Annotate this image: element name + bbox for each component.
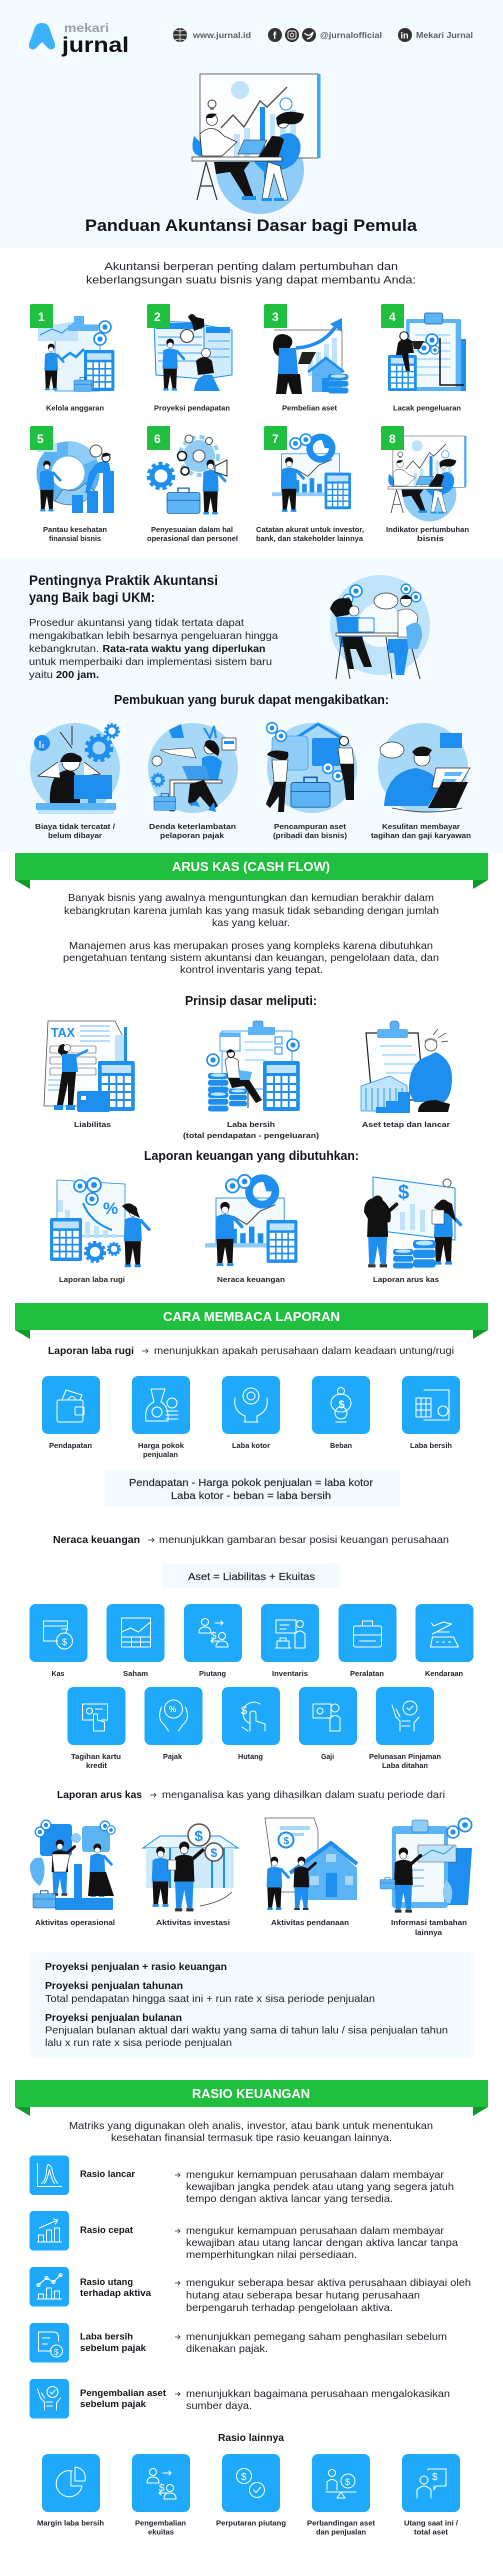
label: Pencampuran aset <box>274 822 346 831</box>
badge 5: 5 <box>37 432 44 446</box>
heading: prinsip dasar: Prinsip dasar meliputi: <box>185 994 317 1008</box>
name: terhadap aktiva <box>80 2288 152 2298</box>
illustration: biaya tidak tercatat <box>30 723 120 814</box>
icon: perputaran piutang <box>222 2454 280 2512</box>
label: bisnis <box>417 534 444 543</box>
label: ekuitas <box>148 2528 174 2536</box>
label: Indikator pertumbuhan <box>386 525 469 534</box>
icon: $ <box>54 2348 59 2357</box>
label: Pajak <box>163 1752 183 1761</box>
label: Pembelian aset <box>282 404 337 412</box>
panel: proyeksi penjualan: Penjualan bulanan aktual dari waktu yang sama di tahun lalu / sisa penjualan tahun <box>45 2024 448 2036</box>
panel: pentingnya praktik akuntansi <box>0 558 503 853</box>
icon <box>30 2379 69 2418</box>
title: Panduan Akuntansi Dasar bagi Pemula <box>85 216 418 235</box>
label: Perputaran piutang <box>216 2518 286 2528</box>
text: cash flow explanation: pengetahuan tentang sistem akuntansi dan keuangan, pengelolaan data, dan <box>63 952 439 964</box>
illustration: pencampuran aset <box>266 723 357 813</box>
website link: www.jurnal.id <box>192 31 251 40</box>
icon: piutang: $ <box>211 1631 217 1642</box>
item 7: catatan akurat <box>256 426 364 543</box>
icon: perbandingan aset: $ <box>345 2477 350 2487</box>
subheading: Pembukuan yang buruk dapat mengakibatkan: <box>114 693 389 707</box>
illustration: liabilitas (tax form): TAX <box>51 1025 75 1040</box>
text: rasio intro: Matriks yang digunakan oleh analis, investor, atau bank untuk menentukan <box>69 2120 433 2132</box>
badge 2: 2 <box>154 310 161 324</box>
logo: mekari jurnal: jurnal <box>61 34 129 57</box>
row: rasio cepat <box>30 2211 458 2261</box>
icon: pendapatan <box>42 1376 100 1434</box>
description <box>175 2388 450 2412</box>
badge 8: 8 <box>389 432 396 446</box>
label <box>256 525 364 543</box>
label <box>43 525 107 543</box>
paragraph: untuk memperbaiki dan implementasi sistem baru <box>29 656 272 668</box>
description <box>175 2331 447 2355</box>
description: menunjukkan bagaimana perusahaan mengalokasikan <box>186 2388 450 2400</box>
label <box>369 1752 441 1770</box>
label: Proyeksi pendapatan <box>154 404 230 412</box>
icon: beban: $ <box>338 1399 345 1411</box>
social handles: f <box>273 31 277 42</box>
illustration: aktivitas investasi: $ <box>210 1846 218 1860</box>
description: kewajiban jangka pendek atau utang yang segera jatuh <box>186 2181 454 2193</box>
illustration: informasi tambahan <box>380 1818 472 1913</box>
text: neraca keuangan definition: Neraca keuangan <box>53 1534 140 1546</box>
item 8: indikator pertumbuhan <box>381 426 469 543</box>
icon: laba bersih <box>402 1376 460 1434</box>
illustration: aset tetap dan lancar <box>361 1021 452 1113</box>
label: Laba bersih <box>227 1120 275 1129</box>
label <box>147 525 238 543</box>
badge 4: 4 <box>389 310 396 324</box>
paragraph: Rata-rata waktu yang diperlukan <box>102 643 266 655</box>
label: Harga pokok <box>138 1441 185 1450</box>
linkedin: in <box>400 30 408 40</box>
label <box>138 1441 185 1459</box>
icon: margin laba bersih <box>42 2454 100 2512</box>
icon: inventaris <box>261 1604 319 1662</box>
banner: arus kas <box>15 853 488 889</box>
label <box>183 1120 320 1140</box>
label: Kelola anggaran <box>46 404 104 412</box>
label: Saham <box>123 1669 148 1678</box>
text: cash flow explanation: kontrol inventaris yang tepat. <box>180 964 323 976</box>
banner: arus kas: ARUS KAS (CASH FLOW) <box>172 859 330 874</box>
label <box>71 1752 121 1770</box>
icon: pengembalian ekuitas: $ <box>159 2483 165 2494</box>
icon: kas: $ <box>62 1637 67 1647</box>
panel: proyeksi penjualan: Proyeksi penjualan tahunan <box>45 1980 183 1992</box>
panel: proyeksi penjualan: Proyeksi penjualan + rasio keuangan <box>45 1961 227 1973</box>
text: cash flow explanation: Banyak bisnis yang awalnya menguntungkan dan kemudian berakhir dalam <box>68 892 434 904</box>
label: bank, dan stakeholder lainnya <box>256 534 364 543</box>
description: mengukur kemampuan perusahaan dalam membayar <box>186 2225 445 2237</box>
description: menunjukkan pemegang saham penghasilan sebelum <box>186 2331 447 2343</box>
label: Laba bersih <box>410 1441 452 1450</box>
description: sumber daya. <box>186 2400 252 2412</box>
banner: rasio keuangan: RASIO KEUANGAN <box>192 2086 310 2101</box>
name: Rasio lancar <box>80 2169 136 2179</box>
label: Margin laba bersih <box>37 2518 104 2528</box>
text: cash flow explanation: kebangkrutan karena jumlah kas yang masuk tidak sebanding dengan jumlah <box>64 905 439 917</box>
name <box>80 2332 147 2353</box>
linkedin <box>398 28 473 42</box>
label: Gaji <box>321 1752 334 1761</box>
label: dan penjualan <box>316 2528 366 2536</box>
illustration: laporan arus kas: $ <box>398 1182 409 1204</box>
description: memperhitungkan nilai persediaan. <box>186 2249 357 2261</box>
icon: tagihan kartu kredit <box>68 1687 126 1745</box>
label: Pelunasan Pinjaman <box>369 1752 441 1761</box>
text: rasio intro: kesehatan finansial termasuk tipe rasio keuangan lainnya. <box>111 2132 392 2144</box>
item 5: pantau kesehatan <box>30 426 114 543</box>
description: berpengaruh terhadap pengelolaan aktiva. <box>186 2302 393 2314</box>
panel: proyeksi penjualan <box>30 1952 473 2058</box>
description: mengukur seberapa besar aktiva perusahaan dibiayai oleh <box>186 2277 471 2289</box>
description <box>175 2225 458 2261</box>
label: Pengembalian <box>135 2518 186 2528</box>
formula box: laba: Pendapatan - Harga pokok penjualan = laba kotor <box>129 1477 374 1489</box>
label: finansial bisnis <box>49 534 101 543</box>
item 1: kelola anggaran <box>30 304 114 412</box>
badge 3: 3 <box>272 310 279 324</box>
label <box>307 2518 375 2536</box>
panel: proyeksi penjualan: lalu x run rate x sisa periode penjualan <box>45 2037 232 2049</box>
panel: header <box>0 0 503 248</box>
heading: yang Baik bagi UKM: <box>29 590 155 605</box>
label: Tagihan kartu <box>71 1752 121 1761</box>
illustration: aktivitas pendanaan <box>265 1818 357 1910</box>
description: hutang atau seberapa besar hutang perusahaan <box>186 2290 420 2302</box>
label: belum dibayar <box>48 831 102 840</box>
label: Pantau kesehatan <box>43 525 107 534</box>
illustration: liabilitas (tax form) <box>44 1021 135 1112</box>
label: Perbandingan aset <box>307 2518 375 2528</box>
name <box>80 2388 166 2409</box>
row: rasio lancar <box>30 2156 454 2205</box>
icon <box>30 2323 69 2362</box>
label: penjualan <box>143 1450 178 1459</box>
label: total aset <box>414 2528 448 2536</box>
illustration: denda keterlambatan <box>148 723 238 813</box>
name <box>80 2277 152 2298</box>
paragraph: mengakibatkan lebih besarnya pengeluaran hingga <box>29 630 278 642</box>
label: pelaporan pajak <box>160 831 225 840</box>
paragraph: 200 jam. <box>56 669 99 681</box>
banner: cara membaca laporan <box>15 1303 488 1339</box>
name: sebelum pajak <box>80 2399 147 2409</box>
illustration: aktivitas operasional <box>30 1820 115 1910</box>
label <box>149 822 236 840</box>
illustration: neraca keuangan <box>205 1175 297 1266</box>
icon: kas <box>30 1604 88 1662</box>
icon: perbandingan aset <box>312 2454 370 2512</box>
label: Aset tetap dan lancar <box>362 1120 450 1129</box>
item 3: pembelian aset <box>264 304 348 412</box>
social handles <box>268 28 382 42</box>
name: sebelum pajak <box>80 2343 147 2353</box>
social handles: @jurnalofficial <box>320 31 382 40</box>
label: Kesulitan membayar <box>382 822 460 831</box>
icon: pengembalian ekuitas <box>132 2454 190 2512</box>
item 6: penyesuaian operasional <box>147 426 238 543</box>
illustration: konsultasi <box>330 575 430 679</box>
row: rasio utang <box>30 2267 471 2314</box>
badge 6: 6 <box>154 432 161 446</box>
icon row: laba rugi components <box>42 1376 460 1459</box>
item 4: lacak pengeluaran <box>381 304 466 412</box>
illustration: two people reviewing growth chart <box>192 74 320 214</box>
icon <box>30 2156 69 2195</box>
label: Lacak pengeluaran <box>393 404 461 412</box>
text: cash flow explanation <box>63 892 439 976</box>
label: Kas <box>52 1669 64 1678</box>
label: Beban <box>330 1441 352 1450</box>
heading <box>29 573 218 605</box>
row: pengembalian aset <box>30 2379 450 2418</box>
label: Utang saat ini / <box>404 2518 459 2528</box>
label <box>386 525 469 543</box>
panel: benefits grid <box>30 304 469 543</box>
label <box>135 2518 186 2536</box>
text: neraca keuangan definition: menunjukkan gambaran besar posisi keuangan perusahaan <box>159 1534 449 1546</box>
label <box>391 1918 467 1937</box>
description <box>175 2277 471 2314</box>
label: Hutang <box>238 1752 263 1761</box>
label: lainnya <box>415 1928 443 1937</box>
icon: harga pokok <box>132 1376 190 1434</box>
description: dikenakan pajak. <box>186 2343 268 2355</box>
label: Liabilitas <box>74 1120 111 1129</box>
paragraph <box>29 617 278 681</box>
label: Denda keterlambatan <box>149 822 236 831</box>
icon: kendaraan <box>416 1604 474 1662</box>
label: Aktivitas investasi <box>156 1918 230 1927</box>
paragraph: Prosedur akuntansi yang tidak tertata dapat <box>29 617 244 629</box>
label <box>35 822 116 840</box>
linkedin: Mekari Jurnal <box>416 31 473 40</box>
formula box: aset <box>162 1563 340 1588</box>
illustration: laporan arus kas <box>364 1177 460 1269</box>
label: kredit <box>86 1761 107 1770</box>
description: tempo dengan aktiva lancar yang tersedia. <box>186 2193 393 2205</box>
icon: pajak <box>144 1687 202 1745</box>
icon: peralatan <box>338 1604 396 1662</box>
website link <box>173 28 251 42</box>
text: laporan arus kas definition: Laporan arus kas <box>57 1789 142 1801</box>
logo: mekari jurnal <box>29 21 129 57</box>
icon: hutang <box>222 1687 280 1745</box>
logo: mekari jurnal: mekari <box>64 21 109 35</box>
banner: rasio keuangan <box>15 2080 488 2116</box>
icon: piutang <box>184 1604 242 1662</box>
label: operasional dan personel <box>147 534 238 543</box>
banner: cara membaca laporan: CARA MEMBACA LAPORAN <box>163 1309 340 1324</box>
label: Kendaraan <box>425 1669 463 1678</box>
icon row: rasio lainnya <box>37 2454 460 2536</box>
description: mengukur kemampuan perusahaan dalam membayar <box>186 2169 445 2181</box>
text: cash flow explanation: kas yang keluar. <box>212 917 290 929</box>
text: cash flow explanation: Manajemen arus kas merupakan proses yang kompleks karena dibutuhkan <box>69 940 433 952</box>
intro text <box>86 261 416 286</box>
panel: proyeksi penjualan: Total pendapatan hingga saat ini + run rate x sisa periode penjualan <box>45 1993 375 2005</box>
label: Laba ditahan <box>382 1761 428 1770</box>
label: Laba kotor <box>232 1441 270 1450</box>
icon: perputaran piutang: $ <box>241 2472 247 2483</box>
intro text: keberlangsungan suatu bisnis yang dapat membantu Anda: <box>86 274 416 286</box>
label: Neraca keuangan <box>217 1275 285 1284</box>
illustration: laba bersih <box>207 1021 300 1112</box>
label: Aktivitas pendanaan <box>271 1918 349 1927</box>
label: Pendapatan <box>49 1441 92 1450</box>
heading: laporan keuangan: Laporan keuangan yang dibutuhkan: <box>144 1149 359 1163</box>
text: rasio intro <box>69 2120 433 2144</box>
label: Laporan laba rugi <box>59 1275 125 1284</box>
formula box: laba: Laba kotor - beban = laba bersih <box>171 1490 331 1502</box>
formula box: aset: Aset = Liabilitas + Ekuitas <box>188 1571 315 1583</box>
icon: pajak: % <box>169 1705 176 1714</box>
text: laporan arus kas definition: menganalisa kas yang dihasilkan dalam suatu periode dari <box>162 1789 445 1801</box>
illustration: aktivitas pendanaan: $ <box>284 1836 290 1847</box>
badge 7: 7 <box>272 432 279 446</box>
intro text: Akuntansi berperan penting dalam pertumbuhan dan <box>104 261 398 273</box>
description <box>175 2169 454 2205</box>
label: Piutang <box>199 1669 226 1678</box>
icon: utang saat ini <box>402 2454 460 2512</box>
item 2: proyeksi pendapatan <box>147 304 232 412</box>
icon: pelunasan pinjaman laba ditahan <box>376 1687 434 1745</box>
label: (total pendapatan - pengeluaran) <box>183 1131 320 1140</box>
row: laba bersih sebelum pajak <box>30 2323 447 2362</box>
label: Penyesuaian dalam hal <box>151 525 233 534</box>
icon: laba kotor <box>222 1376 280 1434</box>
label: tagihan dan gaji karyawan <box>371 831 471 840</box>
formula box: laba <box>104 1470 400 1507</box>
icon <box>30 2267 69 2306</box>
heading: Pentingnya Praktik Akuntansi <box>29 573 218 588</box>
icon <box>30 2211 69 2250</box>
illustration: aktivitas investasi <box>143 1824 238 1911</box>
description: kewajiban atau utang lancar dengan aktiva lancar tanpa <box>186 2237 458 2249</box>
name: Rasio cepat <box>80 2225 133 2235</box>
illustration: kesulitan membayar <box>378 723 470 813</box>
label <box>371 822 471 840</box>
icon: hutang: $ <box>241 1705 247 1717</box>
name: Pengembalian aset <box>80 2388 166 2398</box>
text: laporan laba rugi definition: menunjukkan apakah perusahaan dalam keadaan untung/rugi <box>154 1345 454 1357</box>
icon: utang saat ini: $ <box>432 2472 438 2483</box>
label: Laporan arus kas <box>373 1275 439 1284</box>
icon grid: neraca components <box>30 1604 474 1770</box>
label <box>273 822 347 840</box>
label: Peralatan <box>350 1669 384 1678</box>
heading: rasio lainnya: Rasio lainnya <box>218 2432 284 2444</box>
label: Informasi tambahan <box>391 1918 467 1927</box>
name: Laba bersih <box>80 2332 133 2342</box>
label: Catatan akurat untuk investor, <box>256 525 364 534</box>
badge 1: 1 <box>38 310 45 324</box>
panel: proyeksi penjualan: Proyeksi penjualan bulanan <box>45 2012 182 2024</box>
text: laporan laba rugi definition: Laporan laba rugi <box>48 1345 134 1357</box>
label <box>404 2518 459 2536</box>
icon: gaji <box>299 1687 357 1745</box>
illustration: laporan laba rugi <box>50 1178 149 1267</box>
paragraph: kebangkrutan. <box>29 643 99 655</box>
paragraph: yaitu <box>29 669 53 681</box>
illustration: laporan laba rugi: % <box>103 1199 118 1218</box>
label: (pribadi dan bisnis) <box>273 831 347 840</box>
label: Biaya tidak tercatat / <box>35 822 116 831</box>
label: Inventaris <box>272 1669 308 1678</box>
illustration: aktivitas investasi: $ <box>194 1828 204 1845</box>
label: Aktivitas operasional <box>35 1918 115 1927</box>
icon: beban <box>312 1376 370 1434</box>
name: Rasio utang <box>80 2277 133 2287</box>
icon: saham <box>106 1604 164 1662</box>
